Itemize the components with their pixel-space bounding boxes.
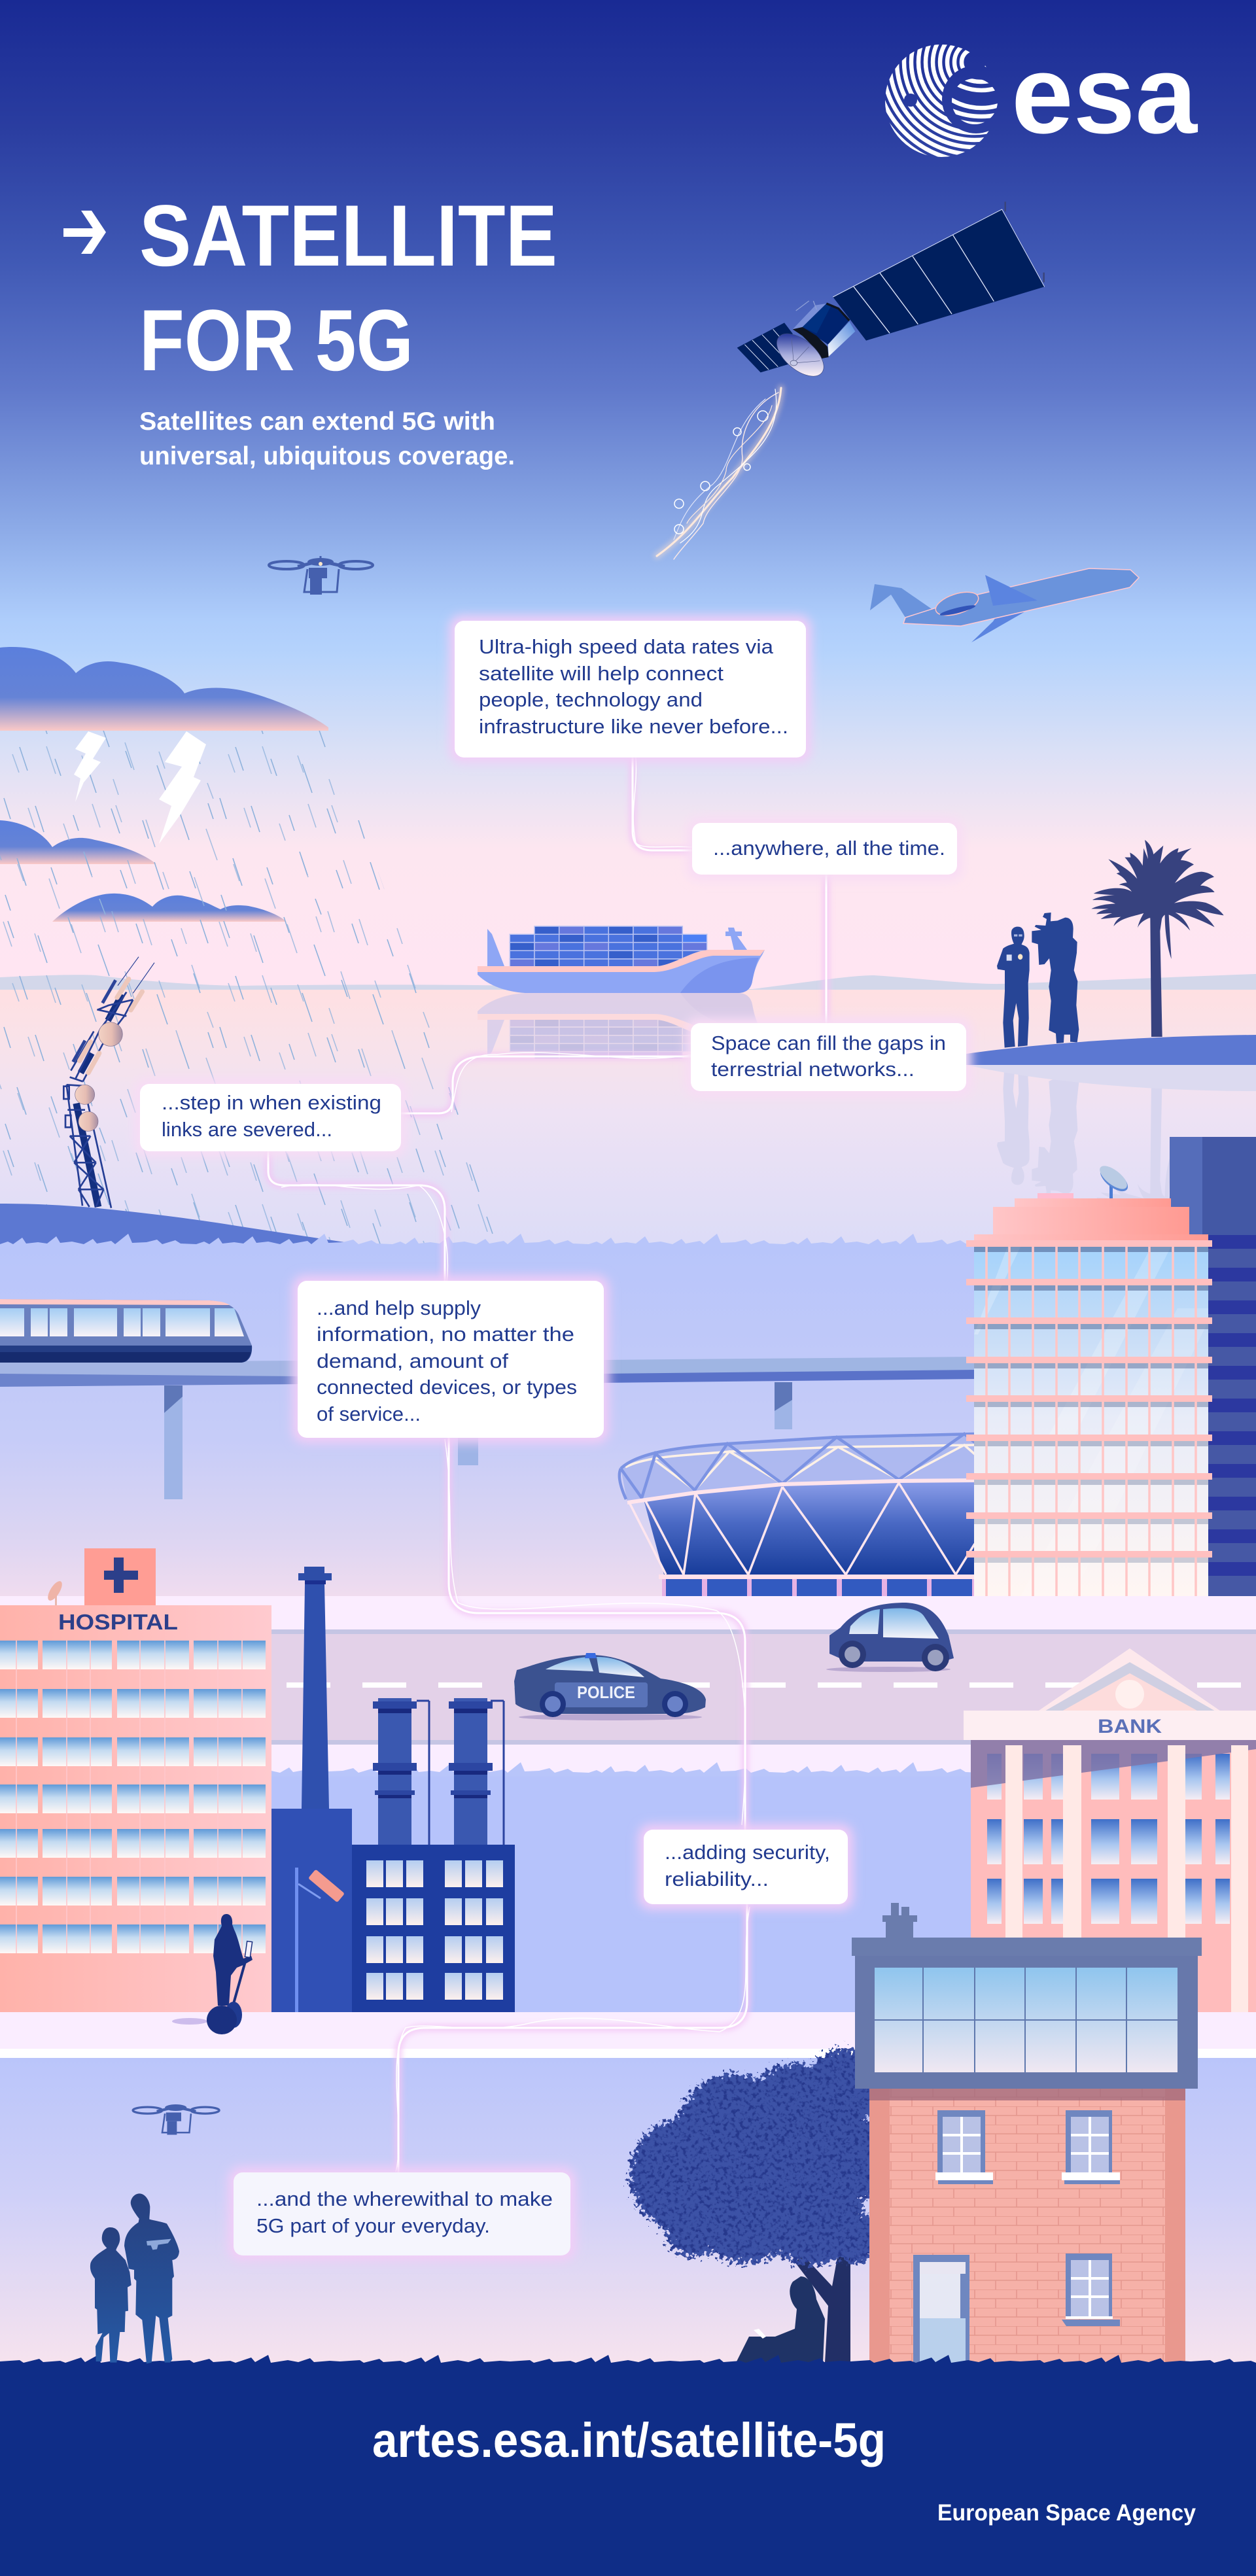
footer credit: European Space Agency: [937, 2500, 1196, 2526]
security camera: [295, 1868, 345, 2012]
police car: [514, 1653, 706, 1720]
tree: [629, 2049, 890, 2363]
tablet: [147, 2239, 171, 2250]
rooftop dish: [45, 1579, 65, 1606]
esa logo: [885, 44, 1198, 157]
train bridge: [0, 1357, 978, 1499]
lightning bolts: [74, 731, 206, 844]
entablature: [964, 1711, 1256, 1740]
hospital sign: [84, 1548, 156, 1605]
palm: [1091, 840, 1224, 1037]
camera operator: [1032, 913, 1079, 1043]
callout: help supply information: ...and help supply: [317, 1297, 481, 1319]
hull: [478, 950, 765, 993]
child: [90, 2227, 131, 2363]
wall shadow: [971, 1740, 1256, 1788]
lower wing: [971, 609, 1030, 642]
stern post: [487, 929, 504, 966]
windows: [0, 1641, 266, 1953]
glass tower: [966, 1162, 1212, 1596]
callout: ultra-high speed data rates: satellite will help connect: [479, 662, 724, 685]
island: right reflection: [966, 1065, 1256, 1091]
trunk: [795, 2250, 850, 2363]
bank label: BANK: [1098, 1716, 1162, 1737]
main block: [352, 1845, 515, 2012]
cloud: large: [0, 647, 328, 731]
connecting light paths: [268, 757, 826, 2172]
container ship: [478, 926, 765, 993]
chimney: [298, 1567, 332, 1809]
columns: [1005, 1745, 1248, 2012]
lawn between road and lower pavement: [0, 1761, 1256, 2013]
dark tower behind glass building: [1170, 1137, 1256, 1596]
mast: [725, 928, 747, 950]
police car: POLICE: [577, 1682, 635, 1702]
person reading under the tree: [736, 2276, 825, 2363]
blue truss: [619, 1434, 975, 1499]
window lower: [1062, 2254, 1120, 2326]
annex: [271, 1809, 352, 2012]
door: [913, 2255, 969, 2364]
blue car: [826, 1603, 954, 1672]
callout: wherewithal: [228, 2167, 576, 2261]
cloud: small: [52, 894, 287, 922]
callout: help supply information: demand, amount of: [317, 1349, 508, 1372]
plinth: [659, 1575, 975, 1579]
island: right: [966, 1035, 1256, 1065]
lower pavement: [0, 2012, 1256, 2058]
verticals: [986, 1240, 1196, 1596]
spacecraft body: [793, 301, 855, 358]
bank: [964, 1648, 1256, 2012]
wall shadow: [869, 2089, 1185, 2100]
hospital: [0, 1548, 271, 2012]
upper wing: [985, 575, 1038, 606]
stadium: [619, 1434, 975, 1596]
lower background: [0, 1246, 1256, 1596]
segway shadow: [172, 2018, 207, 2025]
drone: lower: [133, 2104, 219, 2134]
pediment: [996, 1648, 1256, 1740]
glazing: [875, 1968, 1178, 2072]
facade: [974, 1240, 1208, 1596]
engine: [933, 587, 981, 620]
rooftop dish: [1096, 1162, 1132, 1198]
callout: anywhere, all the time: [687, 818, 962, 880]
callout: ultra-high speed data rates: Ultra-high speed data rates via: [479, 635, 774, 658]
cloud: middle: [0, 820, 156, 864]
house: [852, 1903, 1202, 2364]
title line two: FOR 5G: [139, 292, 413, 389]
callout: step in when existing links are severed: links are severed...: [162, 1118, 332, 1141]
small solar array: [737, 322, 793, 372]
left pillar: [164, 1385, 183, 1499]
rain: [0, 731, 493, 1244]
arrow: [63, 211, 106, 254]
water: [0, 990, 1256, 1246]
logo wordmark: esa: [1011, 33, 1198, 157]
bank windows: [987, 1754, 1230, 1924]
hill: left: [0, 1204, 383, 1248]
family looking at a tablet: [90, 2193, 179, 2363]
callout: step in when existing links are severed: ...step in when existing: [162, 1091, 381, 1114]
right pillar: [775, 1382, 792, 1429]
callout: ultra-high speed data rates: [449, 616, 811, 763]
window upper left: [935, 2110, 993, 2184]
footer band: [0, 2351, 1256, 2576]
callout: help supply information: connected devices, or types: [317, 1376, 577, 1399]
stacks: [373, 1698, 504, 1845]
callout: adding security, reliability: ...adding security,: [665, 1841, 830, 1864]
person on segway: [207, 1914, 253, 2034]
floor bands: [966, 1240, 1212, 1558]
shadow strips: [974, 1247, 1208, 1563]
callout: space can fill the gaps: Space can fill the gaps in: [711, 1032, 946, 1054]
subtitle line two: universal, ubiquitous coverage.: [139, 442, 515, 470]
callout: step in when existing links are severed: [135, 1079, 406, 1157]
adult: [124, 2193, 179, 2363]
roof tiers: [1038, 1193, 1073, 1199]
telecom tower: [63, 957, 154, 1208]
callout: help supply information: information, no matter the: [317, 1323, 574, 1346]
grass edge: lower lawn: [0, 1232, 981, 1248]
tail fins: [870, 584, 937, 618]
containers: [510, 926, 707, 967]
callout: adding security, reliability: reliability...: [665, 1868, 769, 1890]
hull bow shade: [680, 958, 759, 993]
deck left: [0, 1361, 301, 1380]
large solar array: [833, 201, 1045, 341]
signal wave from satellite: [657, 388, 781, 559]
train: [0, 1299, 252, 1363]
drone: top: [269, 556, 373, 595]
glass body: [644, 1480, 975, 1575]
callout: ultra-high speed data rates: people, technology and: [479, 688, 703, 711]
airplane: [870, 568, 1139, 642]
mid ring: [627, 1480, 975, 1503]
ship reflection: [478, 993, 765, 1060]
window upper right: [1062, 2110, 1120, 2184]
middle pillar: [458, 1438, 478, 1465]
subtitle: Satellites can extend 5G with: [139, 408, 495, 436]
title: SATELLITE: [139, 188, 557, 285]
fuselage: [903, 568, 1139, 626]
reporter: [997, 927, 1030, 1048]
pillars: [869, 2089, 890, 2364]
window mullions: [16, 1641, 242, 1953]
deck stripe: [478, 950, 765, 972]
reporter, camera operator and palm tree: [997, 840, 1224, 1048]
title block: [63, 188, 557, 470]
callout: anywhere, all the time: ...anywhere, all the time.: [713, 837, 945, 860]
callout: ultra-high speed data rates: infrastructure like never before...: [479, 715, 788, 738]
callout: wherewithal: 5G part of your everyday.: [256, 2214, 490, 2237]
road and pavement: [0, 1596, 1256, 1784]
hospital label: HOSPITAL: [58, 1610, 178, 1634]
reflections: [974, 1247, 1020, 1334]
factory windows: [366, 1860, 503, 2000]
clouds: [0, 647, 328, 922]
deck right: [602, 1357, 978, 1376]
callout: space can fill the gaps: [686, 1018, 971, 1096]
roof: [852, 1938, 1202, 1956]
lower sky: [0, 2058, 1256, 2367]
upper storey: [855, 1956, 1198, 2089]
logo emblem: swirl: [885, 44, 989, 157]
cross: [104, 1558, 138, 1593]
callout: adding security, reliability: [638, 1824, 853, 1909]
building: [0, 1605, 271, 2012]
stadium roof fill: [621, 1434, 975, 1503]
satellite: [737, 201, 1045, 384]
callout: help supply information: of service...: [317, 1402, 421, 1425]
footer link: artes.esa.int/satellite-5g: [372, 2413, 886, 2467]
chimney: [882, 1903, 917, 1938]
dish: [769, 326, 831, 384]
factory: [271, 1698, 515, 2012]
brick wall: [869, 2089, 1185, 2364]
crown: [629, 2049, 890, 2265]
sky background: [0, 0, 1256, 991]
lower lattice: [629, 1483, 975, 1575]
cream truss: [625, 1445, 975, 1490]
callout: help supply information: [292, 1276, 609, 1443]
lane markings: [287, 1682, 1241, 1688]
distant hills on the horizon: [0, 974, 1256, 990]
logo emblem: globe: [952, 78, 998, 124]
callout: space can fill the gaps: terrestrial networks...: [711, 1058, 915, 1081]
crew and palm reflection on water: [997, 1073, 1170, 1198]
callout: wherewithal: ...and the wherewithal to make: [256, 2187, 553, 2210]
walls: [971, 1740, 1256, 2012]
